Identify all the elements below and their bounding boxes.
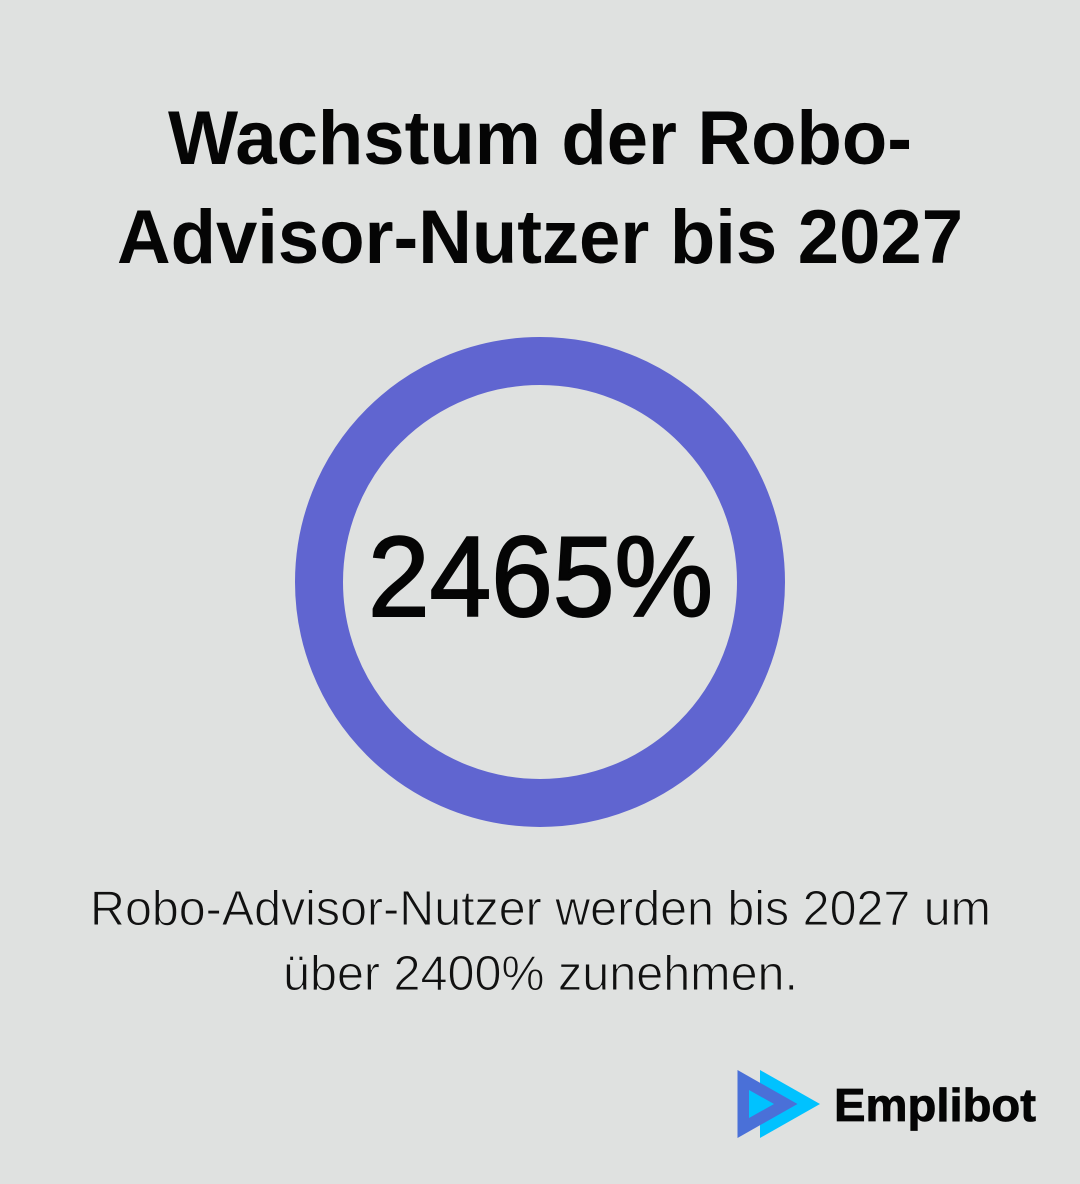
logo: Emplibot <box>738 1070 1036 1138</box>
title: Advisor-Nutzer bis 2027 <box>117 195 963 280</box>
value: 2465%: 2465% <box>368 514 713 641</box>
description text <box>90 882 991 1001</box>
description text: über 2400% zunehmen. <box>283 947 798 1001</box>
donut ring <box>319 361 761 803</box>
title <box>117 96 963 280</box>
icon: play triangles <box>738 1070 820 1138</box>
description text: Robo-Advisor-Nutzer werden bis 2027 um <box>90 882 991 936</box>
logo wordmark: Emplibot <box>834 1079 1036 1131</box>
title: Wachstum der Robo- <box>168 96 912 181</box>
